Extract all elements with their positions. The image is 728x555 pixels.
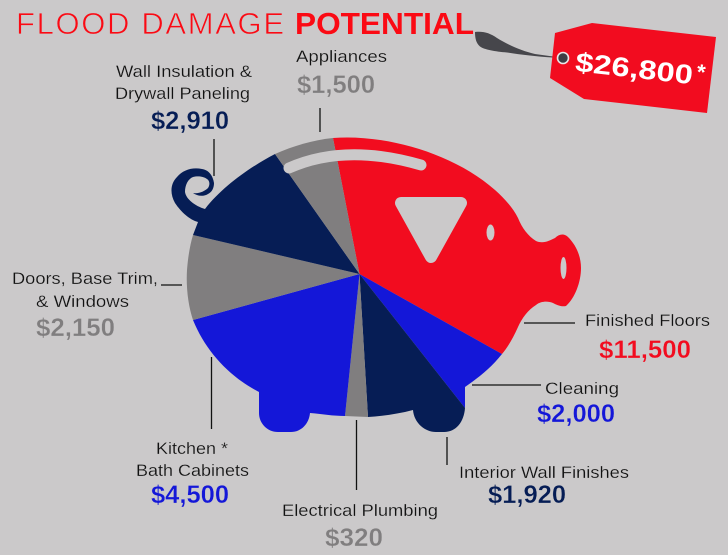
label: interior wall finishes [459,463,629,509]
tag hole [558,52,568,64]
leader lines [161,108,575,490]
pig nostril [560,257,566,279]
label: cleaning: $2,000 [537,400,615,428]
label: kitchen: Bath Cabinets [136,461,249,480]
label: wall insulation: Drywall Paneling [115,84,250,103]
slice: doors, base trim and windows [187,235,360,320]
label: doors [12,269,158,342]
slice: kitchen and bath cabinets [193,274,360,432]
pie-chart piggy bank [171,137,581,432]
label: interior wall finishes: $1,920 [488,481,566,509]
title [16,6,474,41]
label: finished floors: $11,500 [599,336,691,364]
slice: cleaning [360,274,502,408]
tag string [475,32,553,58]
slice: appliances [275,138,360,274]
label: cleaning [537,379,619,428]
tag body [550,23,716,113]
label: appliances: $1,500 [297,71,375,99]
label: finished floors: Finished Floors [585,311,710,330]
label: kitchen: $4,500 [151,481,229,509]
slice: electrical plumbing [345,274,368,417]
label: appliances [296,47,387,99]
coin slot [289,155,421,168]
label: electrical plumbing [282,501,438,552]
label: appliances: Appliances [296,47,387,66]
label: electrical plumbing: Electrical Plumbing [282,501,438,520]
label: doors: $2,150 [36,314,115,342]
pig ear [401,203,461,257]
tag price: $26,800 [574,47,694,90]
slice: interior wall finishes [360,274,465,432]
price tag [475,23,716,113]
label: kitchen [136,439,249,509]
label: cleaning: Cleaning [545,379,619,398]
label: finished floors [585,311,710,364]
label: kitchen: Kitchen * [156,439,228,458]
label: doors: Doors, Base Trim, [12,269,158,288]
label: interior wall finishes: Interior Wall Finishes [459,463,629,482]
label: electrical plumbing: $320 [325,524,383,552]
label: wall insulation [115,62,253,135]
slice: wall insulation and drywall [171,154,360,274]
label: wall insulation: $2,910 [151,107,229,135]
label: doors: & Windows [36,292,129,311]
label: wall insulation: Wall Insulation & [116,62,253,81]
pig eye [486,224,494,240]
title: POTENTIAL [295,6,474,41]
title: FLOOD DAMAGE [16,6,284,41]
slice: finished floors [333,137,581,354]
tag asterisk: * [695,59,707,85]
